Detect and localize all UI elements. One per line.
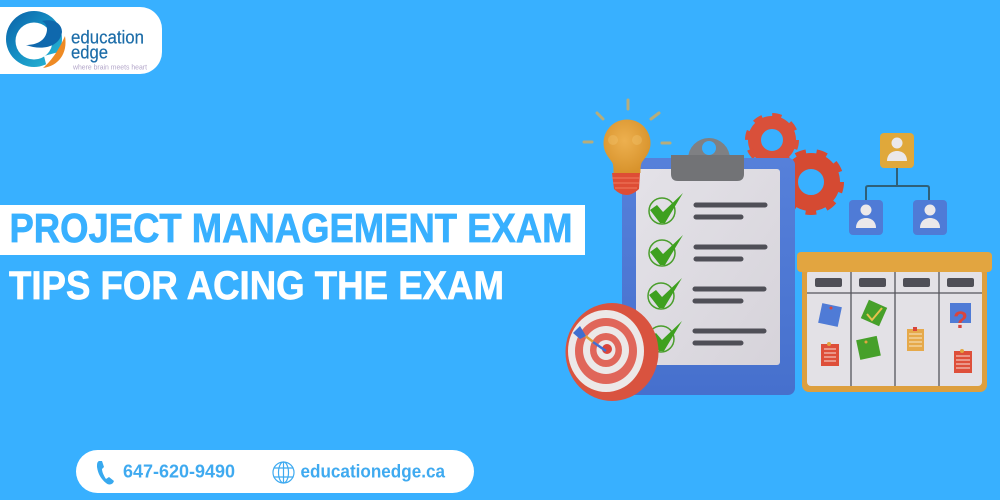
org box: right xyxy=(913,200,947,235)
note: red list 2 xyxy=(954,349,972,373)
checklist item 1 xyxy=(649,193,765,224)
note: green xyxy=(856,336,881,360)
icon: logo swirl xyxy=(6,11,66,68)
paper xyxy=(636,169,780,365)
clip xyxy=(671,138,744,181)
clipboard xyxy=(622,138,795,395)
logo badge: where brain meets heart xyxy=(72,62,148,72)
icon: target with dart xyxy=(566,303,658,401)
icon: phone xyxy=(97,461,114,484)
org box: left xyxy=(849,200,883,235)
note: blue question: ? xyxy=(953,307,968,334)
logo text: education xyxy=(71,28,144,48)
title highlight line: PROJECT MANAGEMENT EXAM xyxy=(10,205,572,251)
checklist item 4 xyxy=(648,321,764,352)
org box: top xyxy=(880,133,914,168)
logo badge xyxy=(0,7,162,74)
icon: gears xyxy=(748,116,841,212)
icon: light bulb xyxy=(584,100,670,195)
contact bar xyxy=(76,450,474,493)
subtitle: TIPS FOR ACING THE EXAM xyxy=(9,264,504,308)
kanban board xyxy=(797,252,992,392)
phone number: 647-620-9490 xyxy=(123,462,235,482)
website: educationedge.ca xyxy=(300,462,446,482)
org chart xyxy=(849,133,947,235)
note: blue question xyxy=(950,303,971,334)
checklist item 2 xyxy=(649,235,765,266)
note: green check xyxy=(861,300,887,326)
icon: globe xyxy=(273,462,294,483)
logo badge: edge xyxy=(71,42,108,62)
note: red list 1 xyxy=(821,342,839,366)
checklist item 3 xyxy=(648,278,764,309)
note: orange list xyxy=(907,327,924,351)
note: blue xyxy=(818,303,842,327)
